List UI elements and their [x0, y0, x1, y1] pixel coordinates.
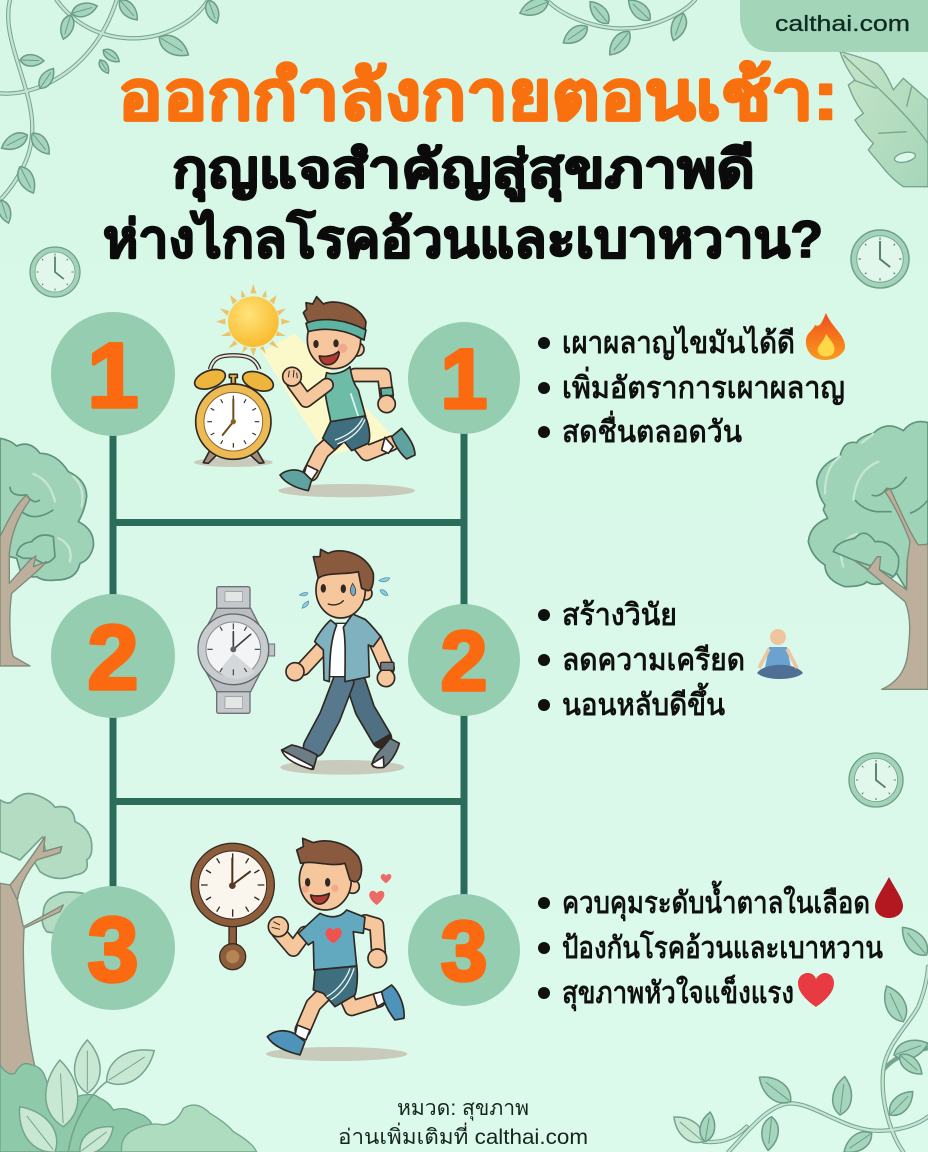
text block: benefits 2 — [538, 599, 745, 722]
number circle right 2 — [408, 604, 520, 716]
text block: benefits 2: นอนหลับดีขึ้น — [562, 683, 725, 722]
open shirt — [315, 620, 337, 682]
number circle right 3 — [408, 894, 520, 1006]
icon: fire — [806, 313, 845, 360]
t-shirt — [298, 910, 365, 970]
torso — [325, 367, 366, 422]
title line 1: ออกกำลังกายตอนเช้า: — [118, 58, 838, 134]
front leg — [303, 993, 325, 1030]
front arm — [278, 932, 305, 949]
text block: benefits 1: สดชื่นตลอดวัน — [562, 411, 742, 449]
number circle left 3 — [51, 886, 175, 1010]
icon: pendulum clock — [191, 843, 274, 970]
text block: benefits 3: สุขภาพหัวใจแข็งแรง — [562, 974, 794, 1012]
decoration: top-centre vine — [517, 0, 695, 60]
number circle right 1: 1 — [441, 332, 487, 426]
number circle right 2: 2 — [441, 614, 487, 708]
text block: benefits 2: สร้างวินัย — [562, 599, 677, 632]
back leg — [355, 680, 382, 738]
front leg — [311, 437, 338, 473]
text block: benefits 3: ป้องกันโรคอ้วนและเบาหวาน — [562, 930, 883, 965]
icon: wristwatch — [198, 587, 275, 713]
head — [359, 587, 372, 600]
shorts — [313, 965, 357, 1007]
light beam — [262, 333, 393, 457]
decoration: clock middle right — [849, 753, 903, 807]
number circle left 1 — [51, 312, 175, 436]
text block: benefits 3: ควบคุมระดับน้ำตาลในเลือด — [562, 881, 870, 922]
back leg — [353, 437, 392, 453]
icon: heart — [798, 973, 834, 1007]
back arm — [355, 375, 387, 397]
icon: sun — [216, 284, 291, 357]
text block: benefits 2: ลดความเครียด — [562, 644, 745, 677]
back arm — [375, 640, 387, 668]
footer text: หมวด: สุขภาพ — [397, 1097, 529, 1121]
back arm — [365, 922, 379, 955]
icon: meditating person — [757, 629, 803, 679]
shadow — [280, 760, 404, 775]
title — [103, 58, 838, 269]
footer text — [338, 1097, 588, 1149]
shadow — [266, 1047, 407, 1061]
walking man — [282, 549, 399, 769]
decoration: right tree — [808, 422, 928, 689]
number circle left 3: 3 — [87, 899, 139, 1001]
text block: benefits 3 — [538, 881, 883, 1012]
illustration: wristwatch and walking man — [198, 549, 404, 775]
sweat drops — [299, 578, 390, 608]
t-shirt — [329, 623, 350, 677]
site tab — [740, 0, 928, 52]
icon: blood drop — [875, 877, 903, 918]
front leg — [314, 682, 343, 747]
number circle left 1: 1 — [87, 325, 139, 427]
text block: benefits 1 — [538, 325, 845, 449]
floating hearts — [369, 874, 391, 905]
decoration: bottom-right vines — [668, 922, 928, 1152]
number circle right 1 — [408, 322, 520, 434]
decoration: clock top left — [30, 247, 80, 297]
shadows — [194, 458, 415, 497]
front arm — [303, 647, 323, 668]
front arm — [293, 383, 327, 401]
decoration: clock top right — [851, 230, 909, 288]
site tab: calthai.com — [775, 11, 910, 36]
decoration: top-left vines — [0, 0, 222, 225]
number circle left 2: 2 — [87, 607, 139, 709]
footer text: อ่านเพิ่มเติมที่ calthai.com — [338, 1122, 588, 1149]
illustration: pendulum clock and runner with heart — [191, 838, 407, 1061]
title line 2: กุญแจสำคัญสู่สุขภาพดี — [172, 141, 755, 202]
number circle left 2 — [51, 594, 175, 718]
decoration: bottom-left bushes — [0, 1039, 257, 1152]
text block: benefits 1: เผาผลาญไขมันได้ดี — [562, 325, 795, 360]
decoration: lower-left tree — [0, 793, 92, 1080]
title line 3: ห่างไกลโรคอ้วนและเบาหวาน? — [103, 208, 823, 269]
heart on shirt — [326, 928, 342, 943]
head — [351, 343, 364, 356]
shorts — [323, 416, 370, 451]
head — [346, 880, 359, 893]
illustration: sun, alarm clock and runner — [192, 284, 415, 497]
text block: benefits 1: เพิ่มอัตราการเผาผลาญ — [562, 367, 845, 405]
number circle right 3: 3 — [441, 904, 487, 998]
ladder connector lines — [113, 430, 464, 900]
runner figure — [280, 297, 415, 491]
decoration: large leaf top right — [840, 52, 928, 187]
icon: alarm clock — [192, 355, 276, 463]
back leg — [345, 993, 378, 1008]
decoration: left tree — [0, 438, 93, 666]
running man — [267, 838, 404, 1055]
